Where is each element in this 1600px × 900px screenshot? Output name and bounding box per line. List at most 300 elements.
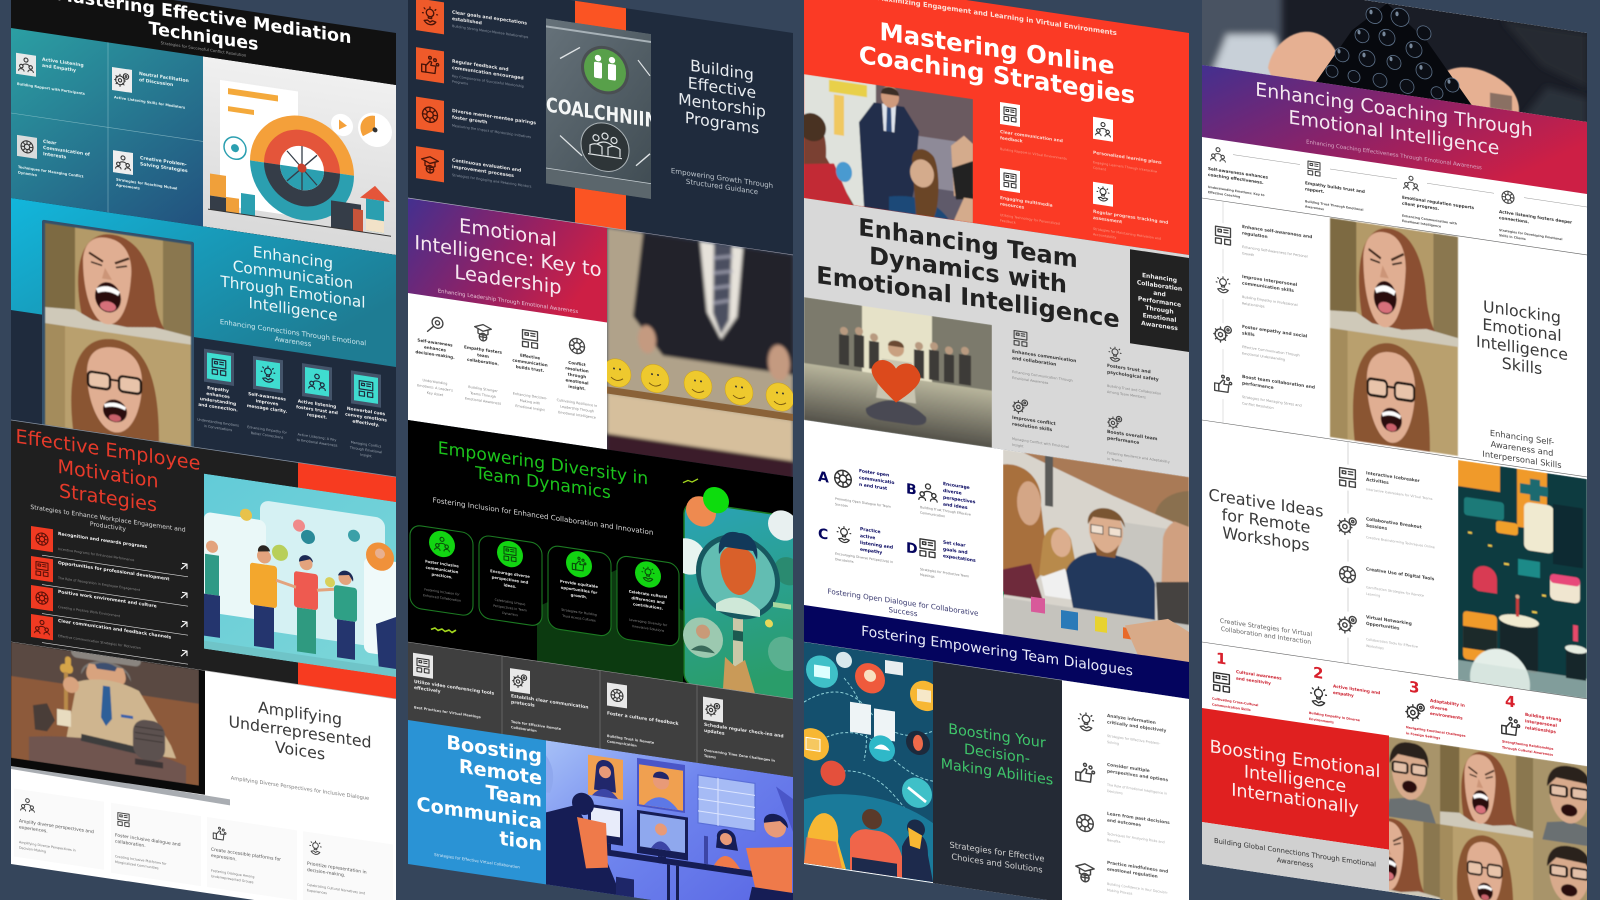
title: Remote — [459, 755, 542, 790]
card: equitable opportunities: Trust Across Cultures — [561, 614, 596, 623]
panel: title block: Building Global Connections Through Emotional — [1214, 837, 1376, 869]
banner: Emotional Intelligence — [1289, 107, 1499, 160]
item: nonverbal cues: effectively. — [352, 419, 380, 429]
item: clear goals: established — [452, 16, 482, 26]
item: C: empathy — [860, 547, 882, 556]
item: breakout — [1335, 512, 1435, 552]
item: active listening: Skills in Clients — [1499, 233, 1526, 241]
item: B: perspectives — [943, 495, 976, 506]
item: culture of feedback: Foster a culture of feedback — [607, 710, 680, 727]
item: empathy — [464, 322, 502, 406]
item 1: 1 — [1216, 649, 1226, 669]
item: prioritize representation: Celebrating Cultural Narratives and — [307, 883, 365, 895]
item: nonverbal cues: Managing Conflict — [351, 440, 381, 449]
item: regular check-ins: updates — [704, 728, 725, 737]
item 4: Through Cultural Awareness — [1502, 745, 1553, 757]
accent stripe — [575, 1, 626, 230]
item: multimedia — [1000, 168, 1060, 231]
item 4: Strengthening Relationships — [1502, 739, 1553, 751]
item: B: diverse — [943, 488, 962, 497]
item: communication — [512, 328, 548, 413]
item: video conferencing: Utilize video conferencing tools — [414, 680, 494, 697]
slide: Mastering Online Coaching Strategies — [798, 0, 1189, 255]
panel: title block: Boosting Emotional — [1210, 737, 1380, 782]
item 1: Cultural awareness — [1236, 669, 1282, 681]
item: empathy: Emotional Understanding — [1242, 351, 1285, 362]
item: networking — [1335, 610, 1418, 655]
item: empathy — [1211, 319, 1308, 365]
item: continuous evaluation: Strategies for Engaging and Retaining Mentors — [452, 173, 532, 189]
image: decision network illustration — [804, 642, 933, 882]
item: breakout: Creative Brainstorming Techniques Online — [1366, 535, 1435, 549]
item: continuous evaluation — [416, 146, 532, 195]
item: C: active — [860, 533, 875, 541]
image: coach in gym — [804, 74, 973, 223]
item: interpersonal — [1211, 269, 1298, 314]
image: laptop with cartoon speaker — [11, 634, 230, 805]
image: coaching sign — [546, 18, 658, 199]
item: B: Encourage — [943, 482, 970, 491]
slide: Effective Employee Motivation Strategies — [11, 420, 404, 700]
item: communication protocols: Establish clear communication — [511, 694, 588, 711]
item: communication: and collaboration — [1012, 355, 1056, 368]
item: clear communication: Building Rapport in Virtual Environments — [1000, 147, 1067, 161]
title: Through Emotional — [219, 272, 366, 312]
title: Building — [690, 56, 754, 84]
item: clear goals: Clear goals and expectations — [452, 11, 527, 27]
item: inclusive dialogue — [115, 812, 181, 874]
item: creative problem solving: Strategies for Reaching Mutual — [116, 178, 177, 191]
item: emotional regulation: client progress. — [1402, 201, 1440, 211]
item: diverse pairings: foster growth — [452, 115, 487, 126]
item: mindfulness: Building Confidence in Your Decision- — [1107, 882, 1168, 895]
item: inclusive dialogue: collaboration. — [115, 839, 146, 849]
item: networking: Collaboration Tools for Effective — [1366, 637, 1418, 649]
item: emotional regulation: Enhancing Communication with — [1402, 214, 1457, 226]
item: empathy: Empathy builds trust and — [1305, 180, 1365, 194]
image: team workshop photo — [1003, 450, 1189, 662]
item: breakout: Sessions — [1366, 523, 1388, 532]
item: regular feedback — [416, 47, 524, 95]
item: neutral facilitation: of Discussion — [139, 77, 173, 88]
title: Mentorship — [678, 89, 766, 121]
image: team collaboration illustration — [204, 474, 396, 677]
card: diverse perspectives — [479, 535, 542, 627]
item: emotional regulation: Emotional Intelligence — [1402, 219, 1441, 229]
item: communication: Emotional Insight — [515, 404, 545, 412]
item: multimedia: Feedback — [1000, 219, 1016, 225]
item: inclusive dialogue: Marginalized Communities — [115, 860, 159, 870]
item: digital tools: Learning — [1366, 592, 1380, 598]
item: collaboration: Boost team collaboration and — [1242, 375, 1315, 391]
item: trust — [1107, 346, 1161, 402]
item 2 — [1309, 663, 1380, 731]
title: Emotional Intelligence — [816, 261, 1120, 334]
item: conflict resolution: Managing Conflict with Emotional — [1012, 437, 1069, 449]
item: learn from past: Benefits — [1107, 838, 1121, 844]
item: active listening: to Emotional Awareness — [297, 438, 338, 448]
column 4 — [1192, 0, 1600, 900]
item: active listening: Strategies for Developing Emotional — [1499, 228, 1562, 241]
subtitle: Creative Strategies for Virtual — [1220, 618, 1312, 638]
item: mindfulness: Practice mindfulness and — [1107, 861, 1168, 875]
item: self-awareness: Effective Coaching — [1208, 190, 1240, 199]
item: communication: Effective — [520, 353, 540, 361]
item: amplify perspectives: Amplify diverse perspectives and — [19, 819, 94, 835]
item: D: Strategies for Productive Team — [920, 567, 969, 578]
card: inclusive communication: Enhanced Collaboration — [423, 593, 461, 603]
image: gauge illustration — [203, 56, 396, 255]
callout: black box: Emotional — [1143, 312, 1176, 324]
item: professional development: The Role of Recognition in Employee Engagement — [57, 576, 141, 592]
title: Emotional — [1482, 315, 1562, 345]
item: D: expectations — [943, 553, 976, 564]
item: neutral facilitation: Active Listening Skills for Mediators — [114, 95, 185, 110]
title: for Remote — [1222, 505, 1310, 537]
item: empathy: Empathy fosters — [464, 344, 502, 355]
item: consider options: Consider multiple — [1107, 763, 1150, 774]
green dot — [703, 485, 729, 515]
item: empathy — [197, 348, 239, 433]
decorative zigzag — [431, 626, 456, 633]
item: active listening — [16, 53, 85, 96]
item: clear communication: Clear communication and — [1000, 130, 1063, 144]
item 3: in Foreign Settings — [1406, 731, 1440, 740]
item: self-awareness: message clarity. — [247, 403, 287, 415]
slide: Boosting Your Decision-Making Abilities — [769, 637, 1189, 900]
item 3: diverse — [1430, 704, 1448, 712]
item: feedback channels — [31, 614, 188, 664]
item: diverse pairings — [416, 97, 536, 146]
title: Workshops — [1222, 523, 1310, 555]
item: nonverbal cues — [345, 369, 387, 461]
item: continuous evaluation: Continuous evaluation and — [452, 159, 521, 174]
slide: Mastering Effective Mediation Techniques — [11, 0, 396, 255]
item: work environment: Creating a Positive Work Environment — [58, 605, 121, 618]
subtitle: Awareness — [275, 335, 312, 348]
title: Coaching Strategies — [859, 40, 1135, 110]
item: nonverbal cues: Through Emotional — [349, 446, 382, 454]
slide: Fostering Empowering Team Dialogues — [804, 420, 1189, 699]
item: video conferencing: Best Practices for Virtual Meetings — [414, 705, 481, 719]
item: conflict resolution: Insight — [1012, 443, 1024, 449]
item: C: C — [818, 526, 828, 544]
item: creative problem solving: Solving Strategies — [140, 161, 188, 174]
item 2: empathy — [1333, 690, 1354, 698]
item 1 — [1212, 649, 1282, 717]
item: analyze — [1078, 709, 1166, 753]
item: progress tracking: Regular progress tracking and — [1093, 210, 1168, 226]
item: mindfulness — [1076, 855, 1169, 900]
item: conflict resolution: resolution skills — [1012, 421, 1053, 433]
card: diverse perspectives: perspectives and — [492, 574, 529, 585]
title: Boosting — [446, 731, 542, 768]
item: analyze: Strategies for Effective Problem- — [1107, 734, 1160, 746]
item: regular feedback: Regular feedback and — [452, 60, 509, 73]
item: analyze: Solving — [1107, 740, 1119, 746]
subtitle: Strategies for Effective — [949, 840, 1045, 864]
title: Mastering Online — [880, 17, 1114, 80]
item: neutral facilitation — [112, 67, 189, 110]
item: collaboration: Conflict Resolution — [1242, 401, 1274, 410]
item: self-awareness: Understanding Emotions: Key to — [1208, 185, 1265, 197]
item: empathy: collaboration. — [467, 357, 499, 367]
image: portrait collage — [1389, 736, 1587, 900]
card: cultural differences: Leveraging Diversity for — [629, 618, 667, 627]
item: digital tools: Gamification Strategies for Remote — [1366, 585, 1424, 598]
item: video conferencing — [413, 653, 494, 721]
item: communication protocols: Tools for Effective Remote — [511, 720, 561, 731]
title: Techniques — [149, 19, 258, 55]
item: C: Discussions — [835, 557, 854, 564]
item: communication protocols: protocols — [511, 699, 535, 709]
item: self-awareness: Self-awareness — [248, 392, 286, 403]
card: cultural differences: Innovative Solutions — [632, 624, 665, 633]
subtitle: Enhancing Self- — [1490, 428, 1554, 447]
title: Intelligence: Key to — [414, 231, 602, 282]
card: inclusive communication: communication — [426, 565, 459, 574]
slide: Boosting Emotional Intelligence Internationally — [1202, 642, 1600, 900]
title: Decision- — [964, 742, 1030, 767]
item: prioritize representation: Experiences — [307, 888, 327, 895]
item 2: 2 — [1313, 664, 1323, 683]
item: communication: Emotional Awareness — [1012, 376, 1049, 385]
item: clear communication: Clear — [43, 140, 56, 147]
item: conflict resolution — [557, 336, 597, 420]
slide: Unlocking Emotional Intelligence Skills — [1202, 198, 1587, 477]
item: B: Communication — [920, 511, 945, 518]
callout: black box: Awareness — [1141, 320, 1178, 332]
item: progress tracking: Strategies for Maintaining Motivation and — [1093, 227, 1161, 241]
item: trust: psychological safety — [1107, 369, 1159, 383]
item: active listening — [296, 362, 338, 448]
item: networking: Virtual Networking — [1366, 615, 1412, 627]
column 2 — [408, 0, 814, 900]
item: professional development — [31, 556, 188, 606]
cards: inclusion actions — [14, 788, 393, 900]
item: active listening: fosters trust and — [296, 404, 338, 416]
subtitle: Enhancing Leadership Through Emotional Awareness — [438, 288, 578, 315]
title: Enhancing — [253, 243, 333, 273]
card: diverse perspectives: Celebrating Unique — [495, 598, 525, 606]
item: culture of feedback — [607, 682, 680, 754]
title: Unlocking — [1483, 297, 1561, 327]
item: D: Meetings — [920, 573, 935, 579]
item 1: and sensitivity — [1236, 676, 1271, 686]
item: B: B — [906, 481, 917, 499]
item: clear communication: feedback — [1000, 135, 1024, 145]
pawns — [1326, 0, 1459, 102]
item 3: Adaptability in — [1430, 698, 1465, 708]
slide: Boosting Remote Team Communication — [408, 720, 793, 900]
item: team performance: Fostering Resilience and Adaptability — [1107, 451, 1170, 464]
item: conflict resolution: Cultivating Resilience in — [557, 398, 597, 408]
item: analyze: Analyze information — [1107, 714, 1156, 726]
item 3: 3 — [1409, 678, 1419, 697]
item: learn from past — [1077, 806, 1170, 851]
item: trust: Fosters trust and — [1107, 364, 1151, 375]
item: empathy: Building Stronger — [468, 385, 498, 393]
item: team performance: in Teams — [1107, 457, 1122, 463]
item: mindfulness: Making Process — [1107, 888, 1133, 896]
item: self-awareness: improves — [256, 398, 279, 408]
item: active listening: Active listening fosters deeper — [1499, 209, 1572, 225]
item: digital tools: Creative Use of Digital Tools — [1366, 566, 1435, 582]
subtitle: Structured Guidance — [686, 177, 758, 196]
item: A: Foster open — [859, 469, 889, 479]
item: feedback channels: Effective Communication Strategies for Motivation — [58, 634, 141, 650]
item: interpersonal: Improve interpersonal — [1242, 275, 1297, 288]
item: collaboration — [1211, 369, 1315, 416]
card: diverse perspectives: Dynamics — [502, 611, 518, 617]
item: prioritize representation: decision-making. — [307, 867, 345, 879]
card: diverse perspectives: ideas. — [504, 582, 517, 589]
item: creative problem solving — [113, 150, 188, 198]
item: B: and ideas — [943, 501, 968, 511]
item: conflict resolution: through — [568, 372, 586, 379]
item: multimedia: resources — [1000, 201, 1025, 211]
item: self-awareness: Self-awareness enhances — [1208, 166, 1268, 180]
item: active listening: Active Listening — [42, 58, 84, 69]
item 2: Environments — [1309, 717, 1334, 725]
item: progress tracking: assessment — [1093, 215, 1122, 225]
item: trust: Among Team Members — [1107, 390, 1146, 400]
item 3 — [1406, 677, 1466, 744]
item: accessible platforms: Create accessible platforms for — [211, 848, 281, 863]
item: empathy: skills — [1242, 330, 1255, 338]
banner title: Fostering Empowering Team Dialogues — [861, 624, 1133, 680]
item: consider options — [1076, 757, 1168, 802]
subtitle: Strategies to Enhance Workplace Engagement and — [30, 504, 186, 534]
card: diverse perspectives: Encourage diverse — [490, 568, 530, 579]
title: Programs — [685, 108, 759, 138]
item: clear communication: Interests — [43, 151, 67, 161]
title: Emotional — [459, 214, 557, 252]
item: communication protocols: Collaboration — [511, 725, 537, 733]
item: self-awareness: Emotions: A Leader's — [417, 383, 453, 393]
slide: Enhancing Coaching Through Emotional Intelligence — [1192, 0, 1587, 255]
item: clear goals: Building Strong Mentor-Mentee Relationships — [452, 24, 529, 39]
title: Motivation — [57, 455, 159, 493]
item: self-awareness: Enhancing Self-Awareness for Personal — [1242, 245, 1308, 259]
item: active listening: Active listening — [298, 399, 336, 410]
item: clear communication: Techniques for Managing Conflict — [18, 165, 83, 179]
slide: Creative Ideas for Remote Workshops — [1202, 420, 1587, 726]
item: amplify perspectives — [19, 797, 94, 861]
card: equitable opportunities: growth. — [571, 592, 588, 600]
item: icebreaker: Interactive Icebreakers for Virtual Teams — [1366, 487, 1433, 501]
subtitle: Empowering Growth Through — [671, 166, 773, 190]
item: inclusive dialogue: Creating Inclusive Platforms for — [115, 854, 167, 866]
title: Intelligence — [249, 294, 337, 325]
card: inclusive communication — [410, 524, 473, 617]
item: video conferencing: effectively — [414, 685, 441, 695]
title: Effective Employee — [16, 425, 200, 475]
item: recognition — [31, 526, 188, 577]
card: diverse perspectives: Perspectives in Team — [493, 604, 527, 613]
card: cultural differences: differences and — [631, 595, 665, 605]
item: team performance — [1107, 415, 1170, 470]
item: empathy: Understanding Emotions — [197, 418, 239, 428]
item: communication: Enhancing Decision- — [513, 392, 547, 401]
subtitle: Interpersonal Skills — [1482, 449, 1562, 470]
card: inclusive communication: Foster inclusive — [425, 559, 459, 569]
item: A: n and trust — [859, 482, 888, 492]
item: regular check-ins — [703, 697, 784, 770]
card: cultural differences — [617, 555, 679, 647]
item: emotional regulation: Emotional regulation supports — [1402, 195, 1474, 210]
item: diverse pairings: Diverse mentor-mentee pairings — [452, 109, 536, 126]
people — [204, 536, 396, 674]
item: nonverbal cues: Insight — [360, 453, 372, 458]
item 3: environments — [1430, 711, 1463, 721]
panel: title block — [1202, 708, 1389, 892]
item 4: relationships — [1525, 725, 1556, 734]
title: Effective — [688, 73, 756, 102]
item 2: Active listening and — [1333, 683, 1380, 695]
item: clear communication: Dynamics — [18, 171, 37, 177]
item: inclusive dialogue: Foster inclusive dialogue and — [115, 833, 181, 848]
image: video conference illustration — [546, 740, 793, 900]
item: consider options: Decisions — [1107, 789, 1123, 795]
item: icebreaker: Interactive Icebreaker — [1366, 471, 1420, 484]
item: learn from past: Techniques for Analyzing Risks and — [1107, 832, 1165, 844]
card: cultural differences: contributions. — [633, 601, 664, 611]
card: equitable opportunities — [548, 545, 611, 637]
item: breakout: Collaborative Breakout — [1366, 517, 1422, 530]
item: mindfulness: emotional regulation — [1107, 866, 1158, 880]
item: self-awareness: Enhancing Empathy for — [247, 425, 287, 435]
title: Intelligence — [1476, 332, 1568, 364]
item 4: 4 — [1505, 692, 1515, 711]
item: accessible platforms: expression. — [211, 853, 237, 863]
item: work environment: Positive work environment and culture — [58, 589, 157, 610]
slide: Enhancing Communication Through Emotional Intelligence — [11, 198, 396, 487]
item 4 — [1502, 691, 1561, 758]
item: self-awareness: Better Connections — [251, 431, 283, 440]
item 4: interpersonal — [1525, 718, 1557, 728]
item: C: Encouraging Diverse Perspectives in — [835, 552, 893, 564]
item: prioritize representation: Prioritize representation in — [307, 862, 367, 876]
item: personalized plans: Content — [1093, 166, 1107, 172]
title: Communication — [233, 257, 353, 293]
item: trust: Building Trust and Collaboration — [1107, 384, 1161, 396]
item: self-awareness — [415, 314, 455, 399]
item: networking: Workshops — [1366, 644, 1384, 650]
subtitle: Amplifying Diverse Perspectives for Inclusive Dialogue — [231, 776, 369, 802]
item: A: A — [818, 469, 829, 487]
item: emotional regulation — [1402, 175, 1494, 236]
title: Voices — [275, 737, 325, 764]
item: active listening: respect. — [307, 412, 327, 421]
item: recognition: Recognition and rewards programs — [58, 531, 147, 550]
item: active listening: connections. — [1499, 215, 1529, 224]
column 1 — [11, 0, 404, 900]
subtitle: Productivity — [90, 521, 126, 533]
callout: black box — [1130, 249, 1189, 352]
item: consider options: perspectives and options — [1107, 768, 1168, 783]
item 1: Communication Skills — [1212, 702, 1251, 712]
title: Creative Ideas — [1209, 485, 1323, 521]
item: consider options: The Role of Emotional Intelligence in — [1107, 783, 1167, 796]
item: recognition: Incentive Programs for Enhanced Performance — [58, 547, 134, 562]
image: data city illustration — [1458, 460, 1587, 699]
item: empathy: and connection. — [198, 402, 238, 414]
item: neutral facilitation: Neutral Facilitation — [139, 72, 189, 84]
item: empathy: enhances — [206, 391, 230, 400]
item: clear communication — [17, 135, 91, 185]
item: B — [906, 476, 976, 523]
